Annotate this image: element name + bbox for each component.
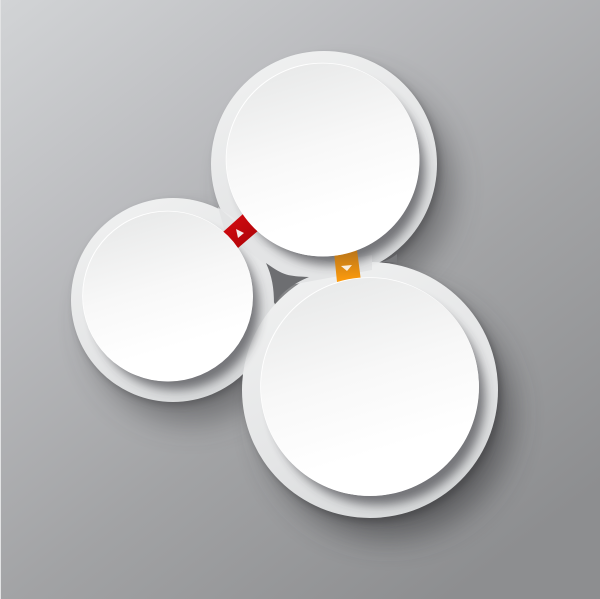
panel: base rings <box>71 51 498 518</box>
icon: white arrow on red ribbon <box>236 229 244 238</box>
ribbon: red connector <box>223 214 259 248</box>
panel: bottom circle <box>261 278 479 496</box>
icon: white arrow on orange ribbon <box>341 265 352 271</box>
ribbon: orange connector <box>334 250 361 282</box>
connector band <box>218 207 372 285</box>
panel: left circle <box>83 212 253 382</box>
ring shadows <box>75 57 512 538</box>
panel: top circle <box>226 64 420 256</box>
small gap right of top ring <box>381 254 397 263</box>
gap triangle between rings <box>266 263 309 304</box>
disc highlights <box>82 63 479 496</box>
disc shadows <box>93 77 485 505</box>
